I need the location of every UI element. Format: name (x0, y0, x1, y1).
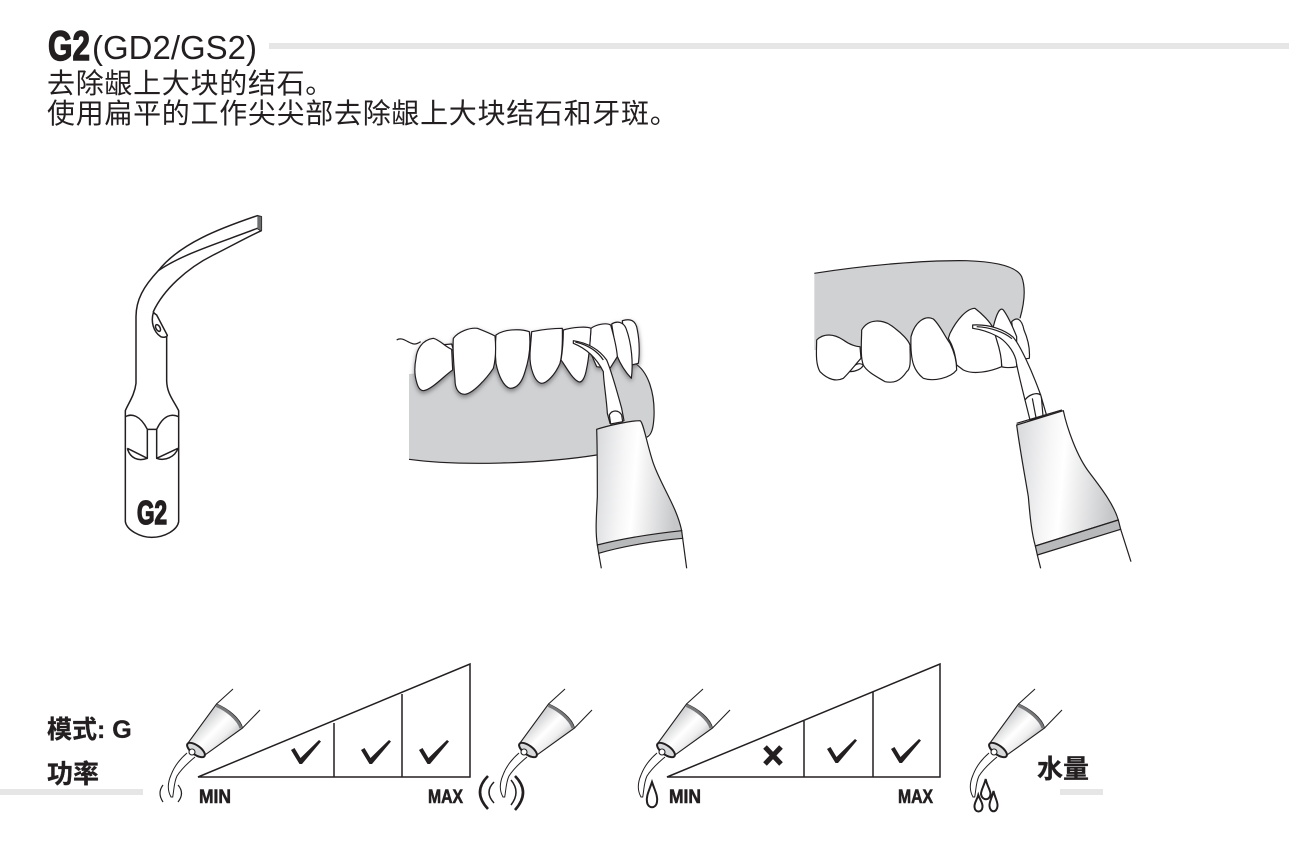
header rule (269, 43, 1289, 49)
footer rule right (1060, 789, 1103, 795)
gum upper (814, 261, 1024, 350)
check marks (291, 740, 449, 764)
icon: handpiece high water (970, 689, 1062, 812)
illustration: G2 tip (125, 216, 261, 537)
handpiece (1017, 411, 1118, 546)
title: (GD2/GS2) (92, 29, 257, 66)
title (48, 22, 257, 69)
check marks (827, 739, 921, 763)
handpiece (596, 421, 682, 545)
footer rule left (0, 789, 143, 795)
gum lower (409, 357, 654, 464)
description text: 使用扁平的工作尖尖部去除龈上大块结石和牙斑。 (47, 98, 678, 129)
max label: MAX (428, 787, 463, 808)
description text (47, 68, 678, 129)
min label: MIN (669, 787, 701, 808)
gum outline (409, 363, 654, 463)
teeth upper (816, 308, 1029, 382)
title: G2 (48, 22, 90, 69)
label: water: 水量 (1037, 754, 1089, 784)
cross mark (765, 747, 781, 764)
min label: MIN (199, 787, 231, 808)
power chart (198, 664, 470, 808)
icon: handpiece low power (160, 689, 260, 802)
illustration: upper jaw with handpiece (814, 261, 1131, 568)
teeth lower (415, 320, 639, 394)
icon: handpiece high power (480, 689, 592, 810)
illustration: lower jaw with handpiece (397, 320, 687, 568)
icon: handpiece low water (638, 689, 730, 807)
label: power: 功率 (47, 759, 99, 789)
scaler tip (573, 341, 624, 423)
max label: MAX (898, 787, 933, 808)
description text: 去除龈上大块的结石。 (47, 68, 334, 99)
scaler tip (973, 325, 1041, 400)
water chart (667, 664, 940, 808)
label: mode: 模式: G (47, 716, 132, 744)
illustration: G2 tip: G2 (137, 494, 167, 531)
